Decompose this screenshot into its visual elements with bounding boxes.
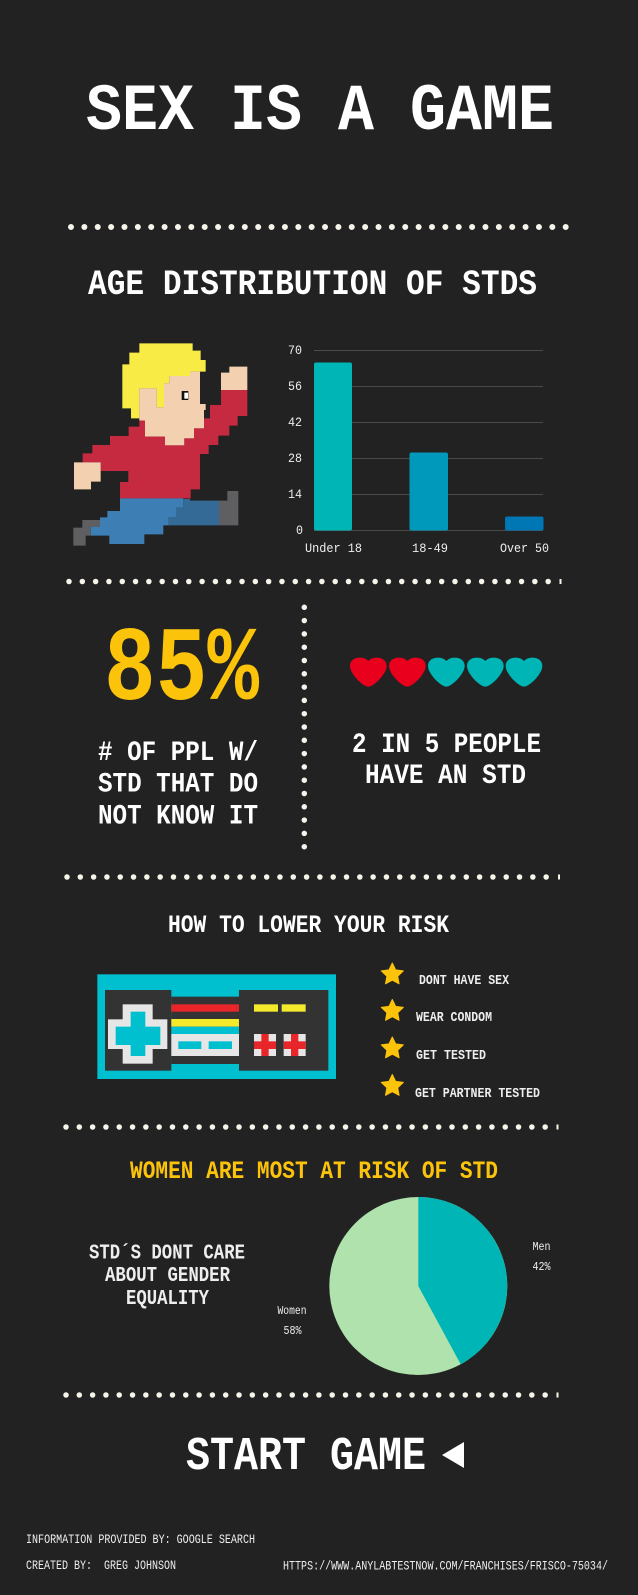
text block: gender equality: STD´S DONT CARE (89, 1242, 245, 1266)
text block: 2 in 5 people: HAVE AN STD (365, 761, 526, 792)
bar chart: Under 18 (305, 541, 362, 556)
icon: five hearts (350, 658, 542, 687)
text block: percent description: NOT KNOW IT (98, 802, 258, 832)
big number: 85%: 85% (104, 611, 259, 731)
bar chart: 28 (288, 451, 302, 466)
text block: percent description: # OF PPL W/ (98, 738, 258, 769)
panel: 2 in 5 people (350, 658, 542, 792)
text block: gender equality (89, 1242, 245, 1311)
bar chart: Over 50 (500, 541, 549, 556)
icon: running pixel character (73, 343, 247, 546)
heading: age distribution: AGE DISTRIBUTION OF STDS (88, 265, 537, 305)
footer credits: CREATED BY: GREG JOHNSON (26, 1559, 176, 1573)
bar chart (288, 343, 549, 556)
bar chart: 18-49 (412, 541, 448, 556)
text block: percent description: STD THAT DO (98, 770, 258, 800)
pie chart: 42% (532, 1260, 551, 1274)
heading: women most at risk: WOMEN ARE MOST AT RISK OF STD (130, 1157, 498, 1186)
title: SEX IS A GAME (86, 74, 554, 149)
text block: gender equality: EQUALITY (126, 1288, 209, 1311)
panel: 85 percent stat (98, 611, 259, 832)
list: risk tips (381, 963, 540, 1102)
list: risk tips: GET TESTED (416, 1048, 486, 1064)
text block: 2 in 5 people: 2 IN 5 PEOPLE (352, 730, 541, 761)
list: risk tips: WEAR CONDOM (416, 1010, 492, 1026)
text block: percent description (98, 738, 258, 832)
text block: 2 in 5 people (352, 730, 541, 792)
bar chart: 14 (288, 487, 302, 502)
panel: women at risk (89, 1157, 551, 1375)
bar chart: 70 (288, 343, 302, 358)
pie chart: Men (532, 1240, 550, 1254)
text block: gender equality: ABOUT GENDER (105, 1265, 230, 1288)
pie chart (278, 1197, 551, 1375)
list: risk tips: GET PARTNER TESTED (415, 1086, 540, 1102)
icon: game controller (97, 974, 336, 1079)
panel: age distribution (73, 265, 549, 556)
bar chart: 42 (288, 415, 302, 430)
panel: lower your risk (97, 911, 540, 1102)
call to action: start game: START GAME (186, 1431, 426, 1484)
footer credits: INFORMATION PROVIDED BY: GOOGLE SEARCH (26, 1533, 255, 1547)
footer credits (26, 1533, 608, 1574)
list: risk tips: DONT HAVE SEX (419, 973, 509, 989)
bar chart: 56 (288, 379, 302, 394)
bar chart: 0 (296, 523, 303, 538)
heading: how to lower your risk: HOW TO LOWER YOUR RISK (168, 911, 449, 940)
pie chart: Women (278, 1304, 306, 1318)
pie chart: 58% (284, 1324, 302, 1338)
